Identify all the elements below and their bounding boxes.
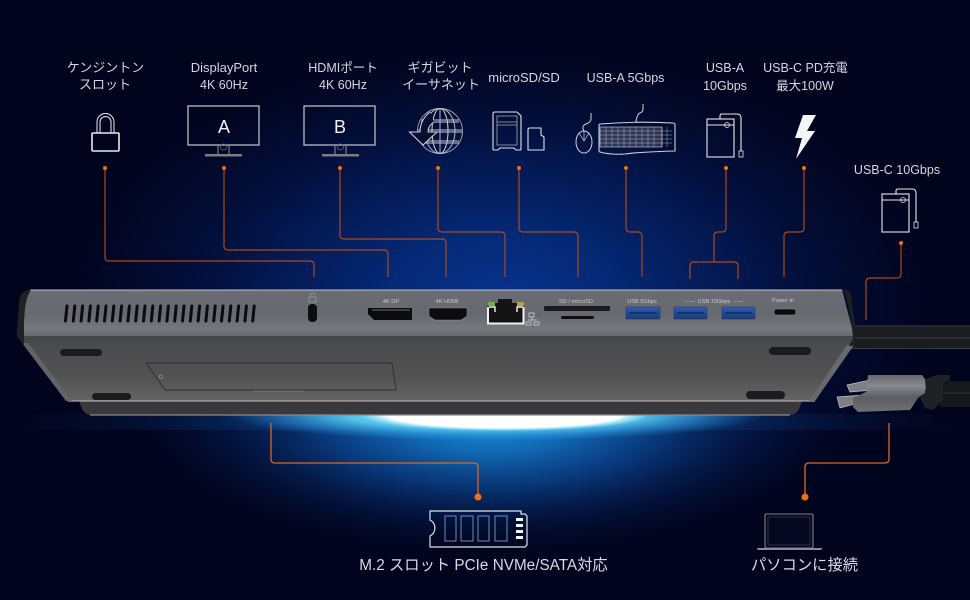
labels: top row: ギガビット: [407, 60, 473, 75]
Kensington port: [308, 293, 317, 322]
USB 5Gbps port: USB 5Gbps: [627, 299, 657, 305]
icon: monitor A: A: [218, 117, 230, 137]
labels: top row: ケンジントン: [67, 60, 144, 75]
rubber feet: [60, 347, 811, 400]
USB-C plugs: [837, 375, 950, 412]
labels: top row: USB-A 5Gbps: [587, 71, 664, 85]
USB 10Gbps ports: [674, 299, 755, 319]
vent slots: [66, 306, 254, 321]
labels: top row: 4K 60Hz: [319, 78, 367, 92]
connector lines: [103, 166, 903, 500]
cables on right: [851, 326, 970, 407]
M.2 slot cover: [146, 363, 396, 391]
labels: top row: HDMIポート: [308, 61, 378, 75]
icon: mouse and keyboard: [576, 104, 675, 154]
labels: top row: 4K 60Hz: [200, 78, 248, 92]
labels: top row: スロット: [79, 77, 131, 92]
icon: lightning bolt: [795, 115, 816, 159]
dock lower slab: [79, 401, 802, 415]
icon: padlock: [92, 114, 119, 151]
icon: external drive (USB-C): [882, 189, 918, 232]
HDMI port: 4K HDMI: [436, 299, 459, 305]
power in USB-C port: [772, 298, 796, 315]
USB 5Gbps port: [626, 299, 660, 319]
DisplayPort port: [368, 299, 412, 320]
icon: external drive (USB-A): [707, 114, 743, 157]
DisplayPort port: 4K DP: [383, 299, 399, 305]
label: PC connection: パソコンに接続: [751, 557, 858, 574]
dock body: [16, 290, 856, 401]
HDMI port: [429, 299, 467, 320]
light glow under dock: [225, 389, 765, 441]
labels: top row: 10Gbps: [703, 79, 747, 93]
USB 10Gbps ports: USB 10Gbps: [698, 299, 731, 305]
dock underside: [22, 340, 854, 401]
labels: top row: USB-C 10Gbps: [854, 163, 940, 177]
icon: SD cards: [493, 112, 544, 150]
labels: top row: 最大100W: [776, 79, 834, 93]
icon: M.2 SSD: [430, 511, 527, 547]
labels: top row: USB-A: [706, 61, 745, 75]
power in USB-C port: Power In: [772, 298, 794, 304]
labels: top row: DisplayPort: [191, 60, 258, 75]
SD and microSD slots: [544, 299, 610, 319]
labels: top row: USB-C PD充電: [763, 61, 848, 75]
labels: top row: [67, 60, 940, 177]
ethernet port: [487, 299, 539, 325]
SD and microSD slots: SD / microSD: [559, 299, 593, 305]
icon: monitor A: [188, 106, 259, 156]
icon: monitor B: [304, 106, 375, 156]
icon: laptop: [757, 514, 822, 550]
icon: globe: [410, 108, 462, 154]
labels: top row: microSD/SD: [488, 70, 560, 85]
dock front face: [16, 290, 856, 346]
labels: top row: イーサネット: [402, 77, 480, 92]
icon: monitor B: B: [334, 117, 346, 137]
label: M.2 slot: M.2 スロット PCIe NVMe/SATA対応: [359, 557, 608, 574]
